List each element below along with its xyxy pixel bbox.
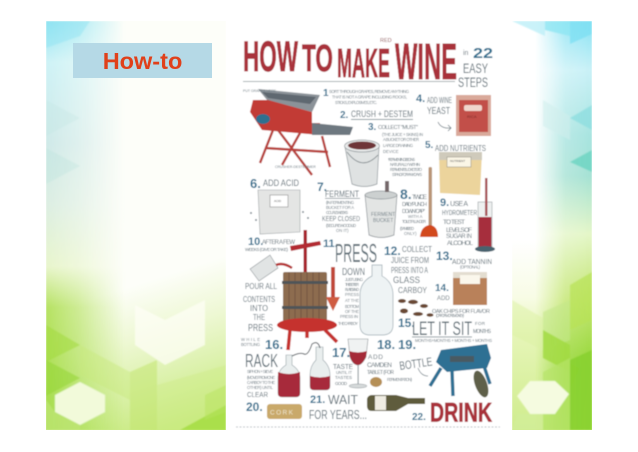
step 16: BOTTLING	[241, 342, 260, 347]
step 22: DRINK	[430, 398, 492, 428]
step 7: COUPLE WEEKS	[326, 210, 348, 215]
step 12: 12.	[384, 244, 401, 258]
step 8: ONLY)	[404, 231, 417, 236]
step 21: WAIT	[328, 392, 358, 407]
step 11: OF THE	[345, 309, 359, 314]
step 8: TOILET PLUNGER	[402, 219, 426, 224]
step 16: (MOVE FROM ONE	[247, 375, 275, 380]
step 16: RACK	[245, 351, 278, 371]
step 17: UNTIL IT	[336, 370, 352, 375]
step 8: (SANITIZED	[400, 226, 414, 231]
step 8: TWICE	[412, 194, 428, 201]
step 20: CORK	[270, 410, 294, 416]
step 12: JUICE FROM	[391, 256, 429, 265]
step 12: COLLECT	[402, 245, 432, 254]
step 4: YEAST	[427, 106, 450, 117]
step 11: PRESS IN	[340, 314, 358, 319]
icon: fermenting bucket: FERMENT	[371, 212, 395, 218]
step 17	[332, 345, 353, 386]
text: pour all contents into the press: THE	[253, 313, 265, 322]
step 1: 1	[323, 88, 329, 99]
text: pour all contents into the press	[243, 281, 277, 334]
step 9: HYDROMETER	[442, 210, 477, 217]
step 3: LARGE DRAINING	[383, 143, 413, 148]
icon: wine glass	[348, 339, 368, 388]
icon: grape crusher: PUT GRAPES HERE	[243, 89, 277, 93]
icon: fermenting bucket	[365, 181, 397, 238]
step 15: FOR	[475, 321, 486, 326]
step 1	[323, 88, 409, 105]
icon: racking bottles with hose	[278, 343, 330, 397]
note: fermenting begins	[388, 157, 423, 177]
step 11: PRESS	[345, 292, 359, 297]
step 3: DEVICE	[383, 149, 399, 154]
icon: tannin packet	[453, 272, 487, 305]
icon: grape crusher	[243, 89, 353, 175]
step 18: TABLET (FOR	[367, 370, 394, 376]
note: fermenting begins: *FERMENTING BEGINS	[388, 157, 415, 162]
step 5: ADD NUTRIENTS	[435, 143, 486, 153]
icon: acid packet: ACID	[274, 199, 282, 203]
step 11: DOWN	[342, 267, 365, 278]
panel: wine poster: WINE	[395, 33, 457, 90]
icon: fermenting bucket: BUCKET	[373, 218, 393, 224]
step 10: AFTER A FEW	[262, 240, 295, 246]
step 10: 10.	[248, 236, 263, 248]
step 6: 6.	[250, 176, 261, 191]
step 16: WHILE	[241, 337, 260, 342]
icon: oak chips	[398, 299, 434, 317]
panel: wine poster	[226, 21, 512, 430]
icon: nutrient packet: NUTRIENT	[450, 159, 465, 163]
step 21: FOR YEARS...	[309, 407, 367, 422]
step 7: ON IT)	[336, 228, 349, 233]
step 6	[250, 176, 299, 191]
step 2: CRUSH + DESTEM	[351, 109, 413, 120]
step 17: TASTES	[335, 375, 352, 380]
step 8: 8.	[400, 186, 412, 202]
step 6: ADD ACID	[263, 178, 299, 189]
step 19: 19.	[398, 337, 416, 352]
step 11: THE BETTER	[345, 282, 359, 287]
title: MAKE	[337, 40, 390, 86]
step 15	[398, 316, 492, 343]
step 11: BOTTOM	[345, 304, 360, 309]
note: fermenting begins: NATURALLY WITHIN	[390, 162, 420, 167]
step 16: 16.	[265, 337, 283, 352]
step 11	[323, 238, 377, 326]
step 12: GLASS	[393, 275, 420, 285]
step 1: STICKS, EXPLOSIVES, ETC.	[335, 100, 377, 105]
step 18	[367, 337, 413, 387]
step 1: SORT THROUGH GRAPES, REMOVE ANYTHING	[329, 89, 409, 94]
step 1: THAT IS NOT A GRAPE INCLUDING ROCKS,	[332, 94, 407, 100]
note: fermenting begins: FERMENT BUCKETS TO	[390, 167, 423, 172]
step 2: 2.	[340, 110, 349, 121]
step 9: LEVELS OF	[446, 227, 472, 234]
step 13: ADD TANNIN	[452, 257, 492, 266]
icon: bottle corker	[430, 344, 491, 399]
icon: yeast packet: RICA	[467, 114, 477, 119]
step 16: SIPHON + SIEVE	[247, 369, 273, 374]
step 10: WEEKS (GIVE OR TAKE)	[245, 247, 288, 252]
step 3: A BUCKET OR OTHER	[383, 137, 419, 142]
step 8: WITH A	[408, 214, 423, 219]
step 7: KEEP CLOSED	[322, 214, 360, 223]
step 18: CAMDEN	[367, 362, 392, 369]
icon: must bucket	[344, 140, 380, 186]
step 11: 11.	[323, 238, 338, 250]
step 21	[309, 392, 367, 422]
step 8: DAILY PUNCH	[402, 202, 427, 208]
step 7: BUCKET FOR A	[326, 205, 354, 210]
icon: grape crusher: CRUSHER-DESTEMMER	[275, 165, 316, 169]
arrow: press down	[326, 267, 340, 311]
text: pour all contents into the press: PRESS	[248, 323, 273, 334]
step 9: USE A	[450, 201, 468, 208]
step 9: ALCOHOL	[447, 240, 473, 247]
icon: glass carboy	[360, 265, 393, 335]
step 20	[246, 400, 302, 419]
panel: wine poster: PRESS	[335, 238, 377, 268]
step 20: 20.	[246, 400, 263, 414]
step 17: 17.	[332, 345, 350, 360]
subtitle: in 22 easy steps: STEPS	[458, 74, 488, 90]
step 5: 5.	[425, 140, 434, 151]
step 7: FERMENT	[325, 189, 359, 200]
step 11: AT THE	[345, 298, 359, 303]
step 7: 7.	[317, 180, 327, 194]
step 15: MONTHS+MONTHS + MONTHS + MONTHS	[415, 338, 492, 343]
step 8: DOWN "CAP"	[402, 209, 425, 215]
step 14: (OR FOR MORE MONEY)	[436, 313, 465, 318]
step 13: (OPTIONAL)	[460, 264, 481, 270]
step 19	[398, 337, 433, 376]
icon: plunger	[420, 167, 438, 237]
step 17: GOOD	[335, 381, 348, 386]
icon: wine bottle on side	[367, 395, 425, 411]
step 14	[432, 283, 490, 318]
step 9: 9.	[440, 197, 449, 209]
step 18: FERMENTATION)	[387, 377, 413, 382]
step 15: MONTHS	[473, 329, 492, 335]
step 4	[416, 93, 452, 131]
step 2	[340, 109, 413, 121]
icon: hydrometer cylinder	[475, 178, 495, 252]
step 16: CARBOY TO THE	[247, 380, 275, 385]
step 22: 22.	[412, 412, 426, 423]
step 9	[440, 197, 477, 247]
step 15: 15.	[398, 316, 415, 330]
note: fermenting begins: STAND FOR ANY DAYS	[392, 172, 422, 177]
step 16: CLEAR	[247, 390, 268, 399]
icon: wine press	[277, 230, 337, 350]
step 22	[412, 398, 492, 428]
step 14: ADD	[437, 296, 450, 302]
step 12	[384, 244, 432, 295]
step 7: (SECURE WOOD LID	[326, 223, 356, 228]
step 3: (THE JUICE + SKINS) IN	[382, 132, 423, 137]
step 14: 14.	[435, 283, 449, 294]
step 21: 21.	[310, 394, 325, 406]
title: HOW	[243, 33, 298, 81]
step 14: OAK CHIPS FOR FLAVOR	[432, 309, 490, 315]
icon: nutrient packet	[439, 152, 482, 195]
panel: right background	[512, 21, 592, 430]
step 11: PLATES AND	[345, 287, 359, 292]
step 7: (IN FERMENTING	[326, 200, 354, 205]
step 13: 13.	[436, 249, 453, 263]
step 9: TO TEST	[443, 219, 465, 226]
subtitle: in 22 easy steps	[458, 45, 493, 90]
title: TO	[302, 38, 333, 80]
step 13	[436, 249, 492, 270]
text: pour all contents into the press: CONTENTS	[243, 295, 275, 304]
step 17: TASTE	[333, 364, 353, 371]
subtitle: in 22 easy steps: in	[463, 50, 469, 57]
title: RED	[380, 38, 392, 44]
panel: left background	[46, 21, 226, 430]
text: pour all contents into the press: POUR ALL	[245, 281, 277, 291]
step 12: CARBOY	[398, 286, 428, 295]
step 5	[425, 140, 486, 153]
step 16: OTHER) UNTIL	[247, 385, 274, 390]
step 15: LET IT SIT	[412, 319, 472, 340]
step 3: 3.	[368, 122, 377, 133]
heading: How-to label	[73, 43, 212, 78]
step 3	[368, 122, 423, 154]
step 11: JUST USING	[345, 277, 363, 282]
step 9: SUGAR IN	[446, 234, 472, 240]
icon: yeast packet	[456, 95, 491, 136]
subtitle: in 22 easy steps: EASY	[463, 60, 488, 76]
heading: How-to label: How-to	[103, 48, 182, 74]
step 8	[400, 186, 428, 236]
step 19: BOTTLE	[398, 355, 433, 373]
title	[243, 33, 457, 90]
step 18: 18.	[377, 337, 395, 352]
subtitle: in 22 easy steps: 22	[473, 45, 493, 62]
step 12: PRESS INTO A	[391, 266, 428, 275]
step 16	[241, 337, 283, 399]
step 3: COLLECT "MUST"	[378, 125, 418, 131]
step 4: 4.	[416, 93, 425, 105]
step 18: ADD	[368, 354, 383, 361]
step 10	[245, 236, 295, 252]
step 7	[317, 180, 360, 233]
step 4: ADD WINE	[427, 96, 452, 105]
step 11: THE CARBOY	[338, 321, 358, 326]
icon: pouring bucket	[250, 255, 292, 281]
text: pour all contents into the press: INTO	[250, 304, 268, 313]
icon: acid packet	[250, 190, 309, 234]
